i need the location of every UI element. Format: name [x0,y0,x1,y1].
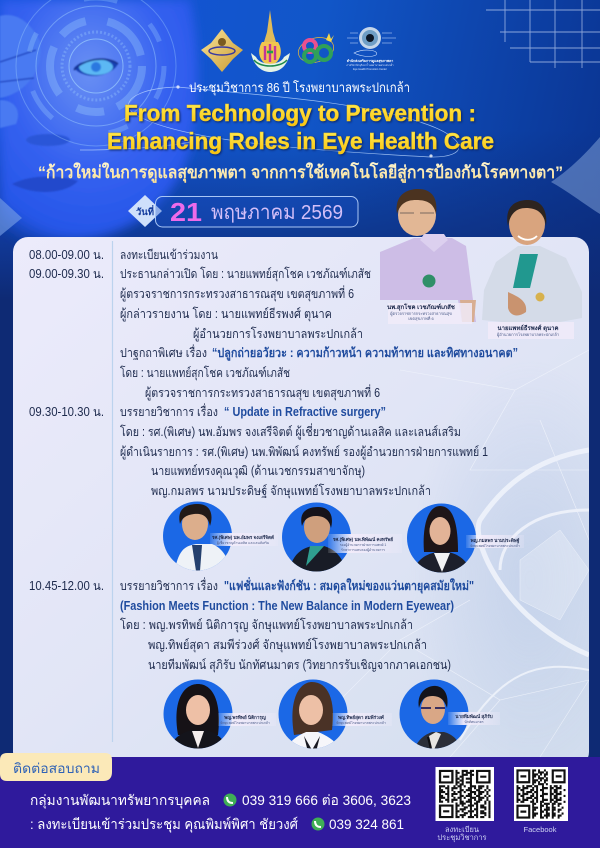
fashion session text: "แฟชั่นและฟังก์ชัน : สมดุลใหม่ของแว่นตายุคสมัยใหม่" [224,577,474,594]
network background [343,350,589,757]
schedule times: 09.00-09.30 น. [29,267,104,281]
speaker circle: Tipsuda: พญ.ทิพย์สุดา สมพีร่วงศ์ [337,714,384,721]
speaker circle: Pipat [282,502,393,572]
logo: eye department [346,27,396,71]
contact line 1: กลุ่มงานพัฒนาทรัพยากรบุคคล [30,792,210,809]
opening session text: ลงทะเบียนเข้าร่วมงาน [120,248,218,262]
title: Enhancing Roles in Eye Health Care [107,128,494,154]
speaker photo: Dr. Teerapong [482,200,582,339]
QR code Facebook [514,767,568,821]
contact line 1: 039 319 666 ต่อ 3606, 3623 [242,792,411,808]
QR captions [437,825,557,842]
logo: eye department: ภาควิชาจักษุวิทยาโรงพยาบาลพระปกเกล้า [346,63,394,68]
date badge [128,195,358,227]
speaker circle: Porntip [164,680,270,748]
schedule divider [112,241,114,742]
logo: gold diamond [201,29,243,72]
fashion session text [120,577,474,673]
speaker circle: Kamonporn: พญ.กมลพร นามประดิษฐ์ [470,537,520,544]
fashion session text: (Fashion Meets Function : The New Balance in Modern Eyewear) [120,599,454,613]
refractive session text: โดย : รศ.(พิเศษ) นพ.อัมพร จงเสรีจิตต์ ผู้เชี่ยวชาญด้านเลสิค และเลนส์เสริม [120,423,461,440]
QR code registration [436,767,494,821]
speaker circle: Kamonporn: จักษุแพทย์โรงพยาบาลพระปกเกล้า [470,543,520,549]
opening session text: ผู้อำนวยการโรงพยาบาลพระปกเกล้า [193,326,363,342]
contact tab: ติดต่อสอบถาม [13,761,100,776]
speaker circle: Porntip: จักษุแพทย์โรงพยาบาลพระปกเกล้า [220,720,270,726]
speaker circle: Pipat: รักษาการแทนรองผู้อำนวยการ [341,548,385,552]
refractive session text: นายแพทย์ทรงคุณวุฒิ (ด้านเวชกรรมสาขาจักษุ) [151,464,365,479]
panel: schedule [13,237,600,800]
speaker photo: Dr. Sukchok: นพ.สุกโชค เวชภัณฑ์เภสัช [387,303,455,311]
logo: hospital crest [251,10,290,72]
date badge: 21 [170,197,202,227]
opening session text: ผู้ตรวจราชการกระทรวงสาธารณสุข เขตสุขภาพที่ 6 [145,384,380,401]
opening session text: ปาฐกถาพิเศษ เรื่อง [120,344,207,360]
date badge: พฤษภาคม 2569 [211,202,343,224]
speaker photo: Dr. Teerapong: ผู้อำนวยการโรงพยาบาลพระปกเกล้า [497,332,559,338]
title [107,100,494,154]
speaker circle: Amporn: ผู้เชี่ยวชาญด้านเลสิค และเลนส์เสริม [217,540,269,545]
speaker photo: Dr. Sukchok [380,189,476,324]
QR captions: ประชุมวิชาการ [437,833,487,842]
fashion session text: นายทีมพัฒน์ สุภิรับ นักทัศนมาตร (วิทยากรรับเชิญจากภาคเอกชน) [148,658,451,673]
footer [0,753,600,848]
speaker circle: Pipat: รองผู้อำนวยการฝ่ายการแพทย์ 1 [340,543,386,547]
fashion session text: บรรยายวิชาการ เรื่อง [120,577,218,593]
QR captions: ลงทะเบียน [445,825,479,834]
refractive session text: “ Update in Refractive surgery” [224,405,386,419]
logo: eye department: Eye Health Promotion Center [353,67,387,71]
opening session text: ผู้กล่าวรายงาน โดย : นายแพทย์ธีรพงศ์ ตุนาค [120,306,332,322]
face image with eye [0,0,198,240]
fashion session text: พญ.ทิพย์สุดา สมพีร่วงศ์ จักษุแพทย์โรงพยาบาลพระปกเกล้า [148,637,427,653]
QR captions: Facebook [524,825,557,834]
speaker circle: Teampat: นายทีมพัฒน์ สุภิรับ [455,713,493,720]
opening session text: โดย : นายแพทย์สุกโชค เวชภัณฑ์เภสัช [120,365,290,381]
schedule times [29,248,104,593]
contact line 2: 039 324 861 [329,816,404,832]
speaker photo: Dr. Teerapong: นายแพทย์ธีรพงศ์ ตุนาค [498,324,558,332]
decorative grid top right [486,0,600,68]
logo: eye department: สำนักส่งเสริมการดูแลสุขภาพตา [347,58,393,64]
speaker circle: Teampat: นักทัศนมาตร [464,720,484,724]
refractive session text: บรรยายวิชาการ เรื่อง [120,403,218,419]
schedule times: 08.00-09.00 น. [29,248,104,262]
orbit lines [80,85,459,158]
subtitle: ประชุมวิชาการ 86 ปี โรงพยาบาลพระปกเกล้า [189,80,410,96]
speaker circle: Amporn [163,502,278,575]
speaker circle: Tipsuda [278,680,386,748]
date badge: วันที่ [136,204,154,218]
refractive session text [120,403,488,499]
speaker circle: Porntip: พญ.พรทิพย์ นิติการุญ [223,714,266,721]
refractive session text: พญ.กมลพร นามประดิษฐ์ จักษุแพทย์โรงพยาบาลพระปกเกล้า [151,483,431,499]
opening session text [120,248,518,401]
refractive session text: ผู้ดำเนินรายการ : รศ.(พิเศษ) นพ.พิพัฒน์ คงทรัพย์ รองผู้อำนวยการฝ่ายการแพทย์ 1 [120,445,488,460]
contact tab [0,753,112,781]
fashion session text: โดย : พญ.พรทิพย์ นิติการุญ จักษุแพทย์โรงพยาบาลพระปกเกล้า [120,617,413,633]
title: From Technology to Prevention : [124,100,476,126]
contact line 2: : ลงทะเบียนเข้าร่วมประชุม คุณพิมพ์พิศา ชัยวงศ์ [30,816,298,833]
decorative shape right [551,137,600,214]
speaker circle: Tipsuda: จักษุแพทย์โรงพยาบาลพระปกเกล้า [336,720,386,726]
opening session text: ผู้ตรวจราชการกระทรวงสาธารณสุข เขตสุขภาพที่ 6 [120,285,354,302]
opening session text: ประธานกล่าวเปิด โดย : นายแพทย์สุกโชค เวชภัณฑ์เภสัช [120,266,371,282]
contact line 1 [30,792,411,809]
speaker circle: Kamonporn [407,504,524,575]
logos row [201,10,396,72]
logo: 86 [296,33,336,66]
speaker circle: Pipat: รศ.(พิเศษ) นพ.พิพัฒน์ คงทรัพย์ [333,536,393,542]
speaker circle: Teampat [400,680,498,748]
schedule times: 09.30-10.30 น. [29,405,104,419]
speaker photo: Dr. Sukchok: เขตสุขภาพที่ 6 [408,316,434,322]
speaker photo: Dr. Sukchok: ผู้ตรวจราชการกระทรวงสาธารณสุข [390,311,452,317]
speaker circle: Amporn: รศ.(พิเศษ) นพ.อัมพร จงเสรีจิตต์ [212,534,274,540]
thai subtitle: “ก้าวใหม่ในการดูแลสุขภาพตา จากการใช้เทคโนโลยีสู่การป้องกันโรคทางตา” [38,162,563,184]
opening session text: “ปลูกถ่ายอวัยวะ : ความก้าวหน้า ความท้าทาย และทิศทางอนาคต” [212,346,518,361]
schedule times: 10.45-12.00 น. [29,579,104,593]
